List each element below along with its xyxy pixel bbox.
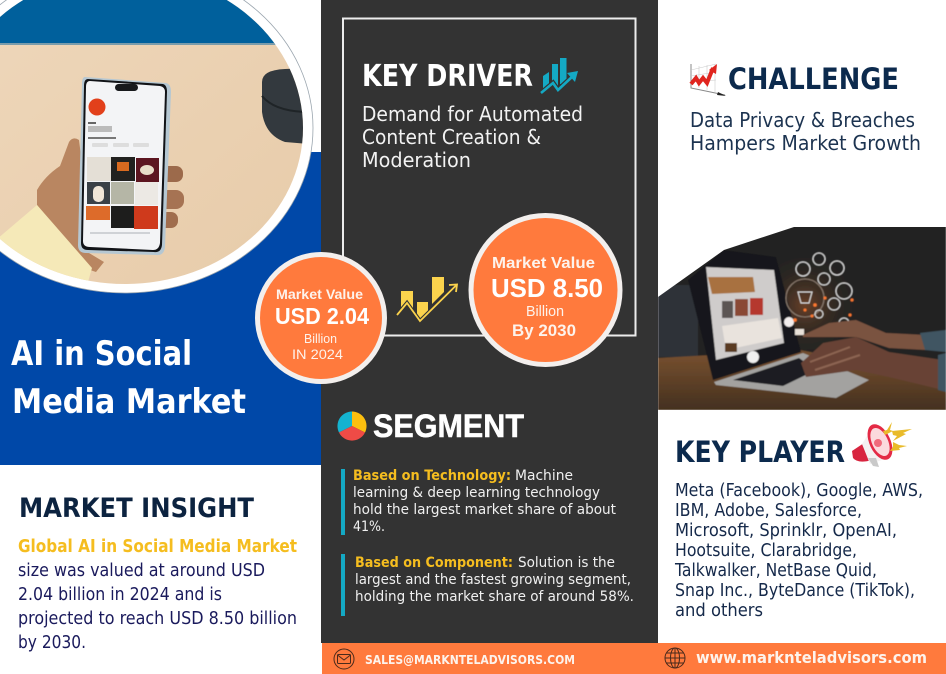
heading: key driver: KEY DRIVER <box>362 59 533 94</box>
text: based on component: Based on Component: <box>355 555 513 571</box>
panel: dark centre column <box>321 0 658 643</box>
badge: market value 2030: USD 8.50 <box>491 273 603 303</box>
text: key players list: Snap Inc., ByteDance (TikTok), <box>675 581 915 601</box>
accent bar: technology <box>341 469 345 535</box>
text: key driver description: Moderation <box>362 148 471 172</box>
text: market insight body: by 2030. <box>18 633 86 653</box>
badge: market value 2024 <box>258 254 384 382</box>
icon: cyan growth chart <box>541 58 578 93</box>
text: key players list: Microsoft, Sprinklr, OpenAI, <box>675 521 897 541</box>
badge: market value 2030: By 2030 <box>512 321 576 340</box>
text: based on technology: Machine <box>515 468 573 484</box>
text: based on component: Solution is the <box>518 555 615 571</box>
badge: market value 2030: Billion <box>526 303 564 320</box>
panel: title block blue background <box>0 152 321 465</box>
icon: megaphone <box>852 420 912 467</box>
image: hands on laptop with shopping icons <box>658 220 946 410</box>
text: market insight body: projected to reach USD 8.50 billion <box>18 609 297 629</box>
text: key players list <box>674 481 923 621</box>
heading: segment: SEGMENT <box>373 408 524 444</box>
text: key driver description: Content Creation & <box>362 125 541 149</box>
text: based on technology: learning & deep learning technology <box>353 485 600 501</box>
panel: footer bar <box>322 643 946 674</box>
heading: key player: KEY PLAYER <box>675 435 845 469</box>
title: AI in Social Media Market <box>11 334 246 422</box>
text: key driver description <box>362 102 583 172</box>
heading: challenge: CHALLENGE <box>728 62 899 96</box>
text: email: SALES@MARKNTELADVISORS.COM <box>365 652 575 667</box>
text: market insight body <box>18 537 297 653</box>
text: based on technology: Based on Technology: <box>353 468 511 484</box>
badge: market value 2024: Market Value <box>276 286 363 302</box>
text: challenge description: Hampers Market Growth <box>690 131 921 155</box>
icon: globe <box>665 648 685 668</box>
text: based on component <box>355 555 634 605</box>
text: based on technology: hold the largest market share of about <box>353 502 616 518</box>
text: challenge description <box>690 108 921 155</box>
title: AI in Social Media Market: AI in Social <box>11 334 192 374</box>
text: market insight body: Global AI in Social Media Market <box>18 537 297 557</box>
text: market insight body: size was valued at around USD <box>18 561 265 581</box>
title: AI in Social Media Market: Media Market <box>12 382 246 422</box>
heading: market insight: MARKET INSIGHT <box>19 493 255 524</box>
badge: market value 2030: Market Value <box>492 255 595 272</box>
text: based on technology: 41%. <box>353 519 385 535</box>
text: key players list: Hootsuite, Clarabridge, <box>675 541 857 561</box>
accent bar: component <box>341 554 345 616</box>
text: key players list: and others <box>675 601 763 621</box>
icon: mail <box>334 649 354 669</box>
text: website: www.marknteladvisors.com <box>696 648 927 667</box>
panel: key driver frame <box>343 18 636 336</box>
image: hand holding phone in oval frame <box>0 0 313 300</box>
text: key driver description: Demand for Automated <box>362 102 583 126</box>
icon: segment pie <box>337 411 367 441</box>
text: market insight body: 2.04 billion in 2024 and is <box>18 585 222 605</box>
icon: yellow growth chart <box>397 277 457 321</box>
icon: challenge chart <box>691 64 726 96</box>
badge: market value 2024: USD 2.04 <box>275 303 369 329</box>
badge: market value 2024: Billion <box>304 331 337 346</box>
text: key players list: Talkwalker, NetBase Quid, <box>674 561 877 581</box>
text: based on component: holding the market share of around 58%. <box>355 589 634 605</box>
text: based on component: largest and the fastest growing segment, <box>355 572 631 588</box>
text: key players list: IBM, Adobe, Salesforce, <box>675 501 862 521</box>
text: based on technology <box>353 468 616 535</box>
text: challenge description: Data Privacy & Breaches <box>690 108 915 132</box>
badge: market value 2030 <box>471 216 620 364</box>
badge: market value 2024: IN 2024 <box>292 346 343 362</box>
text: key players list: Meta (Facebook), Google, AWS, <box>675 481 923 501</box>
